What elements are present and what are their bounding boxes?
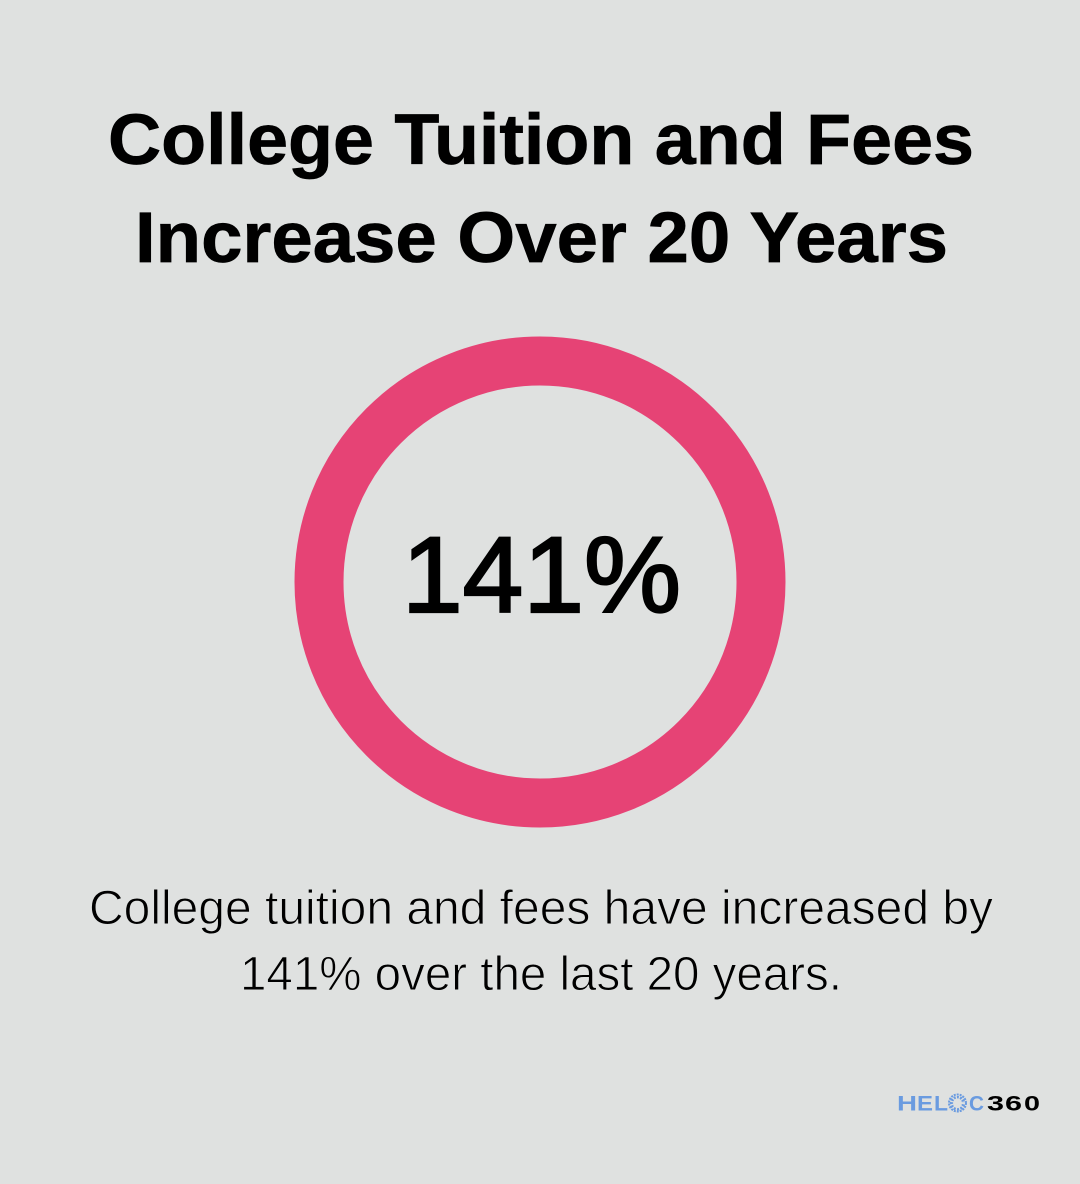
ring value: 141%: 141% [402, 514, 681, 635]
title: College Tuition and Fees [108, 101, 974, 180]
donut ring [319, 361, 761, 803]
description text [89, 882, 993, 1001]
logo: HELOC360: L [934, 1092, 948, 1116]
description text: College tuition and fees have increased by [89, 882, 993, 935]
logo: HELOC360: E [917, 1092, 933, 1116]
title: Increase Over 20 Years [135, 199, 948, 278]
logo: HELOC360: O [949, 1092, 966, 1116]
logo: HELOC360: 0 [1024, 1092, 1040, 1116]
icon: logo swirl [949, 1094, 966, 1112]
logo: HELOC360: 6 [1005, 1092, 1022, 1116]
logo: HELOC360: C [969, 1092, 984, 1116]
logo: HELOC360 [897, 1092, 1040, 1116]
logo: HELOC360: 3 [987, 1092, 1004, 1116]
title [108, 101, 974, 278]
description text: 141% over the last 20 years. [240, 948, 842, 1001]
logo: HELOC360: H [897, 1092, 917, 1116]
